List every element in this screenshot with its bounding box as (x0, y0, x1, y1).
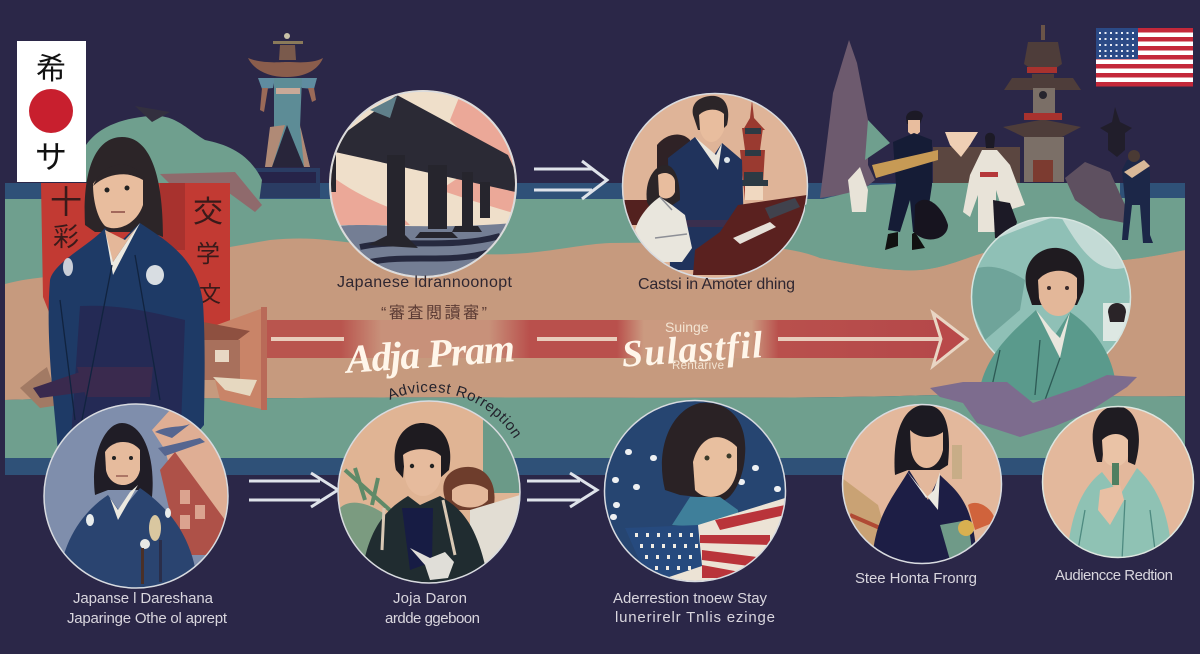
figure with musical instrument (872, 111, 948, 250)
red banners: 文 (199, 282, 221, 307)
label: japanese daresha: Japanse l Dareshana (73, 590, 214, 607)
title: adja pram: Adja Pram (342, 325, 516, 382)
circle: audience reaction (1042, 406, 1194, 560)
label: ardde ggeboon: ardde ggeboon (385, 610, 480, 627)
brown cloth at left (20, 367, 60, 408)
main figure in navy kimono (33, 137, 205, 453)
circle: flag portrait (604, 400, 786, 582)
caption: suinge: Suinge (665, 319, 709, 335)
red banners: 彩 (53, 222, 79, 252)
hill behind left figure (86, 106, 262, 212)
arrow: bridge to casting (534, 161, 607, 199)
caption: rentarive: Rentarive (672, 360, 724, 372)
red banners: 交 (193, 196, 223, 229)
landscape bands (5, 183, 1185, 475)
label: lunerirelr: lunerirelr Tnlis ezinge (615, 609, 775, 626)
red banners: 十 (50, 184, 82, 220)
label: audience reaction: Audiencce Redtion (1055, 567, 1173, 584)
circle: actor portrait (338, 400, 523, 590)
label: adverstion: Aderrestion tnoew Stay (613, 590, 768, 607)
main red arrow (203, 307, 967, 410)
arrow: bottom second (527, 473, 597, 507)
purple rocks under right portrait (930, 375, 1137, 437)
Japanese flag banner: サ (35, 139, 67, 175)
arrow: bottom first (249, 473, 338, 507)
label: casting: Castsi in Amoter dhing (638, 276, 795, 293)
statue top left (248, 33, 323, 198)
figure in dark suit (1122, 150, 1153, 243)
circle: casting (620, 92, 812, 282)
label: japanese concept: Japanese ldrannoonopt (337, 274, 513, 291)
Japanese flag banner: 希 (36, 53, 66, 86)
circle: bottom left portrait (43, 403, 232, 590)
curved label: audience reception: Advicest Rorreption (390, 382, 520, 438)
right scene green ground (805, 162, 1185, 270)
script caption: “審査閲讀審” (381, 304, 487, 322)
red banners: 学 (196, 241, 220, 268)
pagoda beside main figure (203, 322, 257, 396)
right scene: tower, building, pagoda, lantern, rock (820, 25, 1132, 198)
label: joja daron: Joja Daron (393, 590, 467, 607)
American flag (1096, 28, 1193, 86)
label: japaringe: Japaringe Othe ol aprept (67, 610, 228, 627)
label: stee honta: Stee Honta Fronrg (855, 570, 977, 587)
figure in white robe (963, 133, 1025, 238)
title: successful: Sulastfil (620, 324, 764, 376)
red banners (41, 183, 230, 340)
circle: figure with produce (841, 403, 1003, 565)
circle: right portrait (970, 215, 1132, 400)
circle: bridge (329, 90, 517, 278)
Japanese flag banner (17, 41, 86, 182)
